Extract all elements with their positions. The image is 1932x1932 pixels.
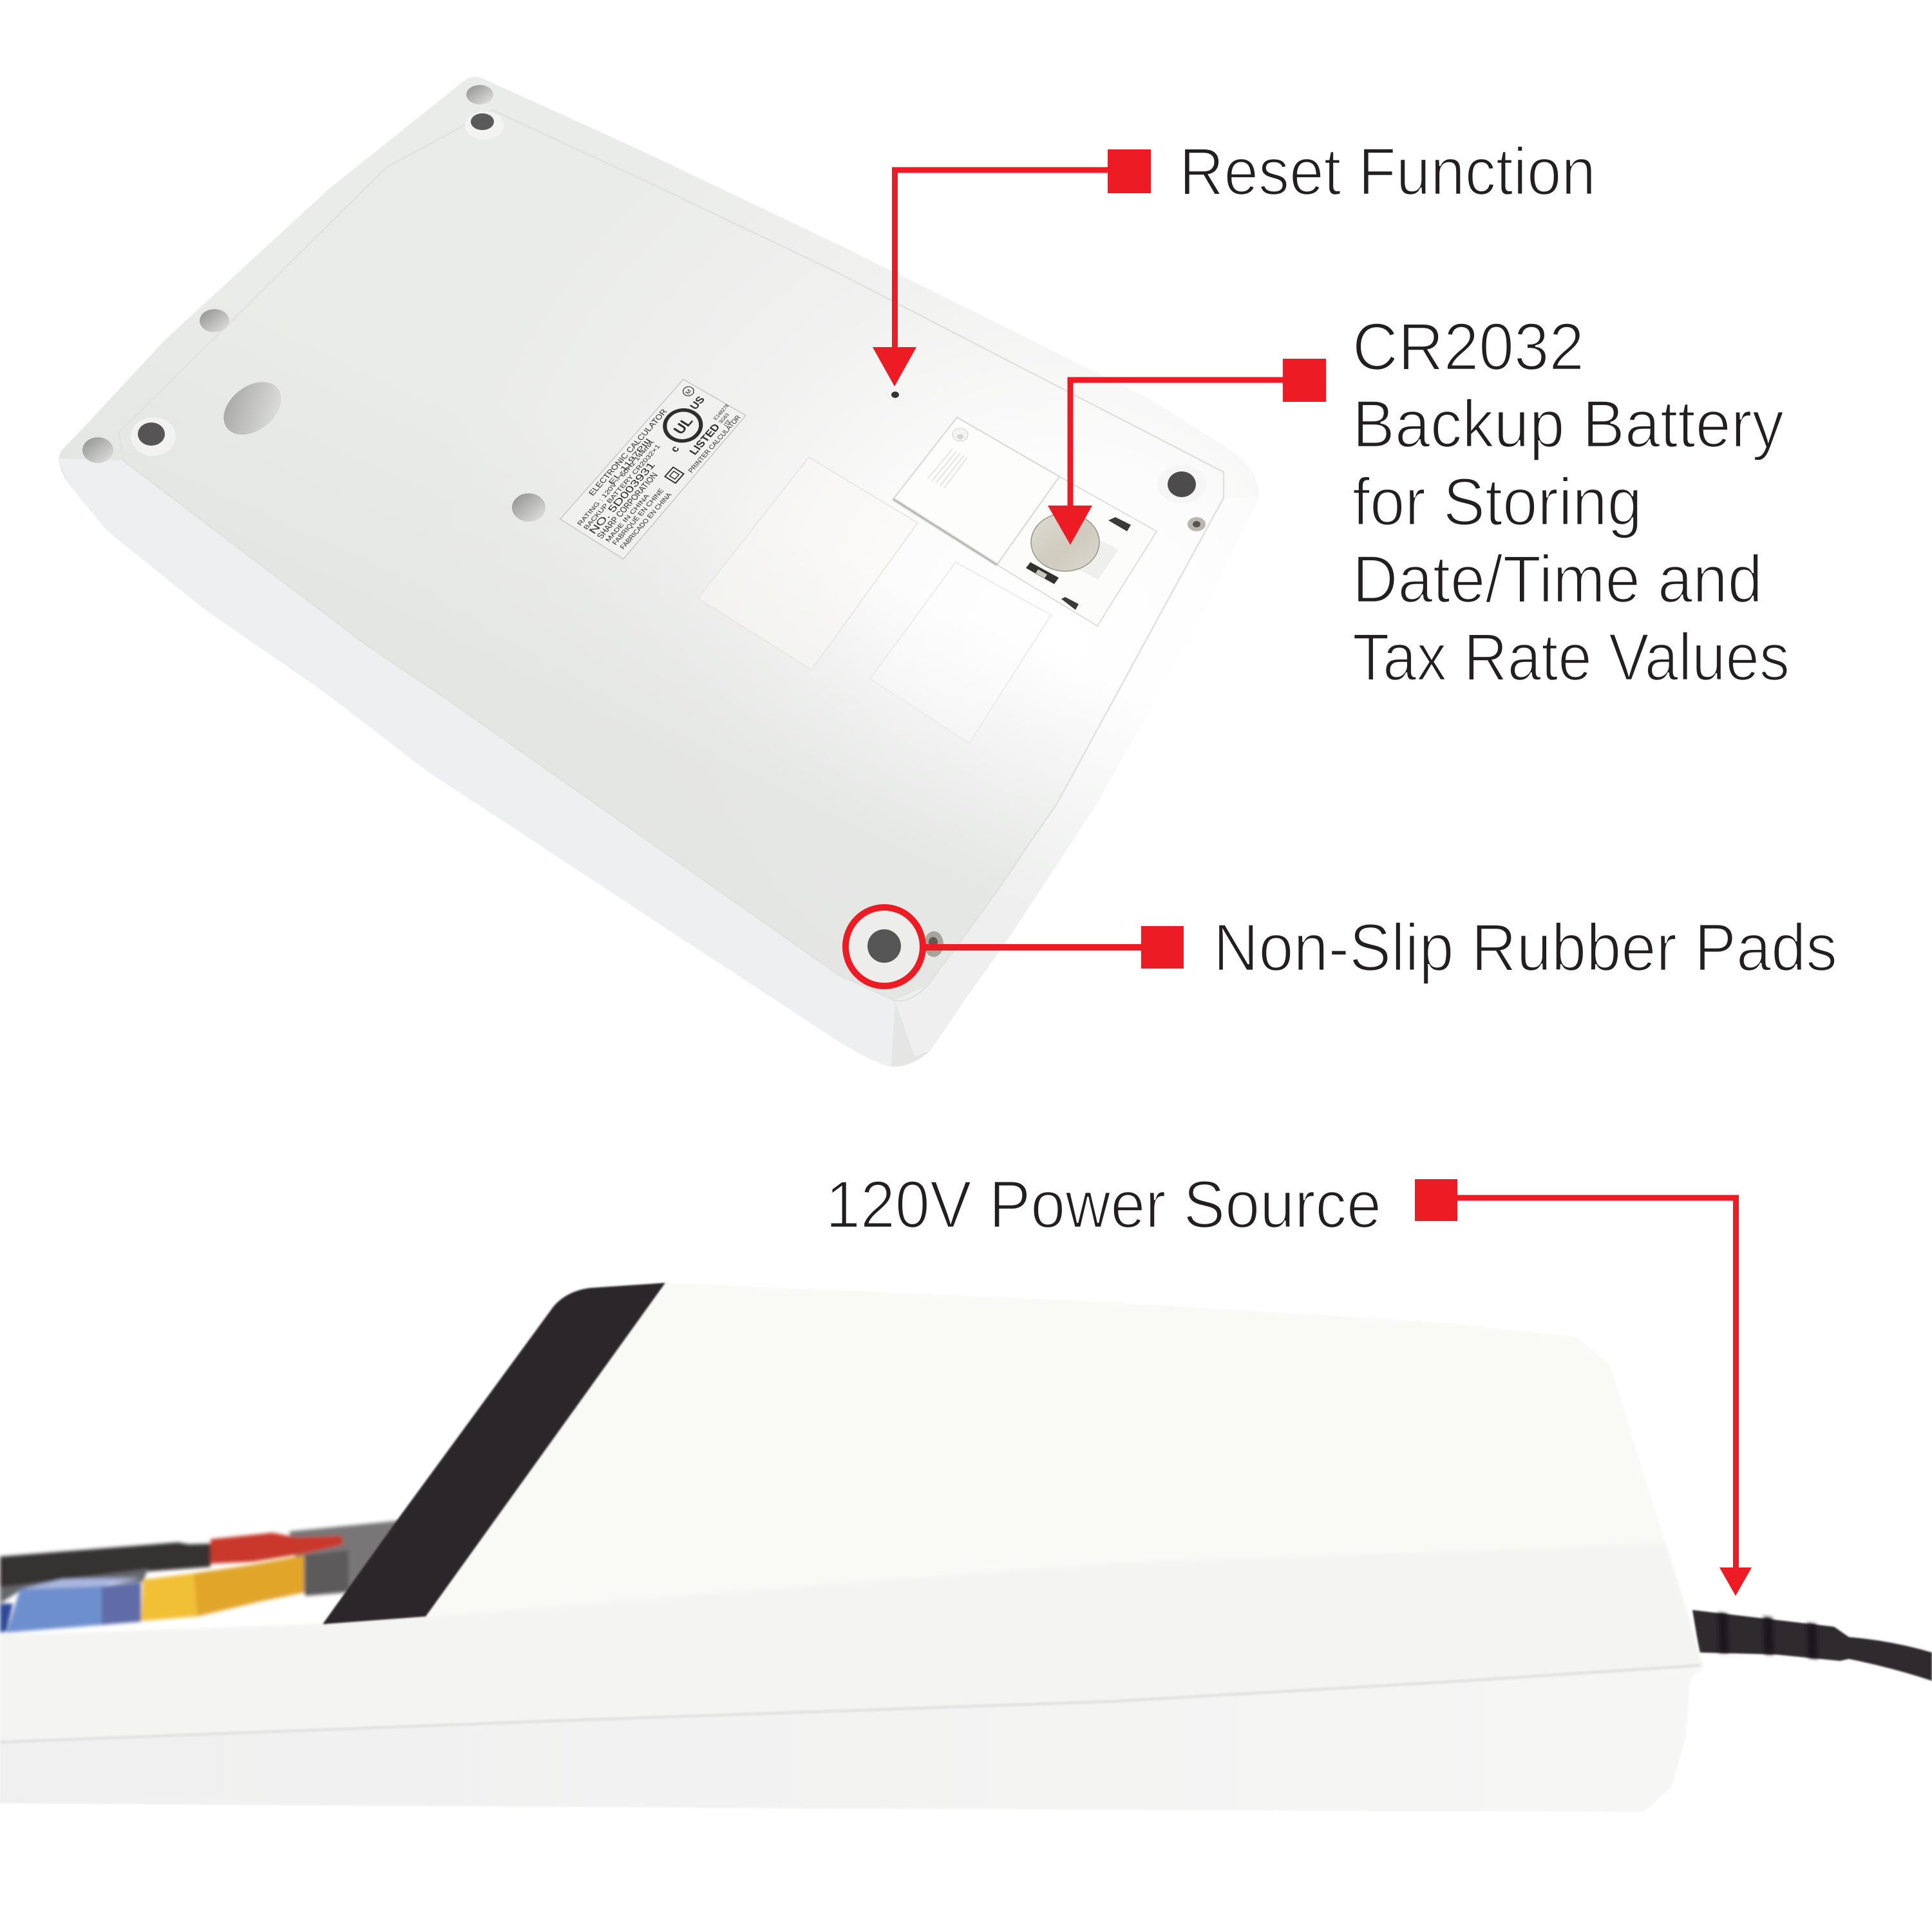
underside body silhouette xyxy=(59,77,1259,1066)
rating label xyxy=(560,379,746,559)
screw: bottom xyxy=(924,931,943,957)
slot hole xyxy=(214,371,291,446)
right bevel band xyxy=(895,498,1259,1056)
label text: c xyxy=(668,444,682,455)
battery label: Date/Time and xyxy=(1352,542,1763,617)
lower body seam xyxy=(0,1665,1700,1742)
grey band below black bar xyxy=(0,1569,148,1604)
callout: backup battery xyxy=(1048,310,1790,695)
black bar xyxy=(0,1542,211,1587)
pad marker square xyxy=(1141,926,1184,969)
label text: LISTED xyxy=(687,422,723,457)
label text: ELECTRONIC CALCULATOR xyxy=(587,408,669,497)
battery contact: lower left xyxy=(1026,562,1059,584)
label text: NO. 5D003931 xyxy=(587,460,658,536)
callout: reset function xyxy=(873,135,1596,386)
label text: SHARP CORPORATION xyxy=(595,471,659,540)
label text xyxy=(565,379,745,553)
reset pinhole xyxy=(885,387,905,401)
door catch xyxy=(952,428,968,441)
underside lower shading xyxy=(59,77,1259,1066)
CR2032 coin cell xyxy=(1031,513,1099,571)
label text: FABRICADO EN CHINA xyxy=(619,491,674,551)
panel: calculator underside xyxy=(57,77,1259,1066)
screw: right xyxy=(1188,517,1206,531)
hole: centre xyxy=(512,493,545,522)
faint moulded panel: right xyxy=(870,562,1051,743)
pad label: Non-Slip Rubber Pads xyxy=(1213,911,1837,985)
door grip ridges xyxy=(928,449,967,488)
reset marker square xyxy=(1108,149,1151,193)
battery label: for Storing xyxy=(1352,465,1642,540)
battery door xyxy=(893,417,1059,565)
keypad keys xyxy=(0,1520,412,1633)
battery label: Backup Battery xyxy=(1352,387,1784,462)
rubber pad: left xyxy=(131,417,176,456)
battery label: Tax Rate Values xyxy=(1352,620,1790,695)
label text: PRINTER CALCULATOR xyxy=(687,414,743,474)
power marker square xyxy=(1415,1179,1457,1221)
label text: US xyxy=(688,394,707,412)
label text: UL xyxy=(670,414,696,437)
callout: rubber pads xyxy=(846,907,1837,986)
reset label: Reset Function xyxy=(1179,135,1596,209)
callout: power source xyxy=(826,1168,1752,1596)
hole: left corner xyxy=(82,437,113,463)
reset connector arrow xyxy=(873,170,1108,386)
grey keys, back rows xyxy=(289,1520,412,1596)
pad connector line xyxy=(925,944,1142,951)
grey key, front xyxy=(305,1550,348,1596)
rubber pad: right xyxy=(1157,465,1206,504)
battery contact: upper right xyxy=(1108,517,1131,531)
middle body band xyxy=(0,1543,1704,1742)
panel: calculator side view xyxy=(0,1283,1932,1812)
battery contact: bottom xyxy=(1061,597,1079,610)
rubber pad: top corner xyxy=(465,111,504,140)
label text: EL-1197PIII xyxy=(607,437,653,486)
power connector arrow xyxy=(1457,1198,1752,1596)
lower body band xyxy=(0,1667,1700,1812)
blue key xyxy=(0,1578,141,1633)
label text: RATING : 120V ~ 60Hz 144mA xyxy=(576,439,656,527)
battery connector arrow xyxy=(1048,380,1283,545)
faint moulded panel: left xyxy=(698,457,918,670)
red key xyxy=(211,1533,343,1564)
label text: M xyxy=(684,388,694,396)
rubber pad: bottom xyxy=(847,909,922,984)
pad highlight ring xyxy=(846,907,923,986)
label text: MADE IN CHINA xyxy=(604,493,652,544)
lower-left bevel band xyxy=(57,459,895,1066)
black display strip xyxy=(323,1283,665,1624)
battery marker square xyxy=(1283,359,1326,402)
battery label: CR2032 xyxy=(1352,310,1584,384)
power label: 120V Power Source xyxy=(826,1168,1381,1242)
side view body xyxy=(0,1283,1704,1812)
battery slot xyxy=(1075,535,1119,580)
battery label xyxy=(1352,310,1790,695)
power cord xyxy=(1692,1610,1932,1681)
hole: left edge xyxy=(200,309,229,332)
yellow key xyxy=(141,1555,304,1621)
label text: 3G63 xyxy=(717,412,730,424)
underside inner panel outline xyxy=(119,110,1224,1001)
label text: FABRIQUÉ EN CHINE xyxy=(611,487,666,547)
label text: E148278 xyxy=(712,403,730,421)
label text: BACKUP BATTERY CR2032×1 xyxy=(582,444,662,531)
label text: ITE xyxy=(722,419,732,428)
hole: top corner xyxy=(466,85,493,104)
door lower shadow xyxy=(893,499,997,565)
battery compartment xyxy=(997,477,1157,626)
